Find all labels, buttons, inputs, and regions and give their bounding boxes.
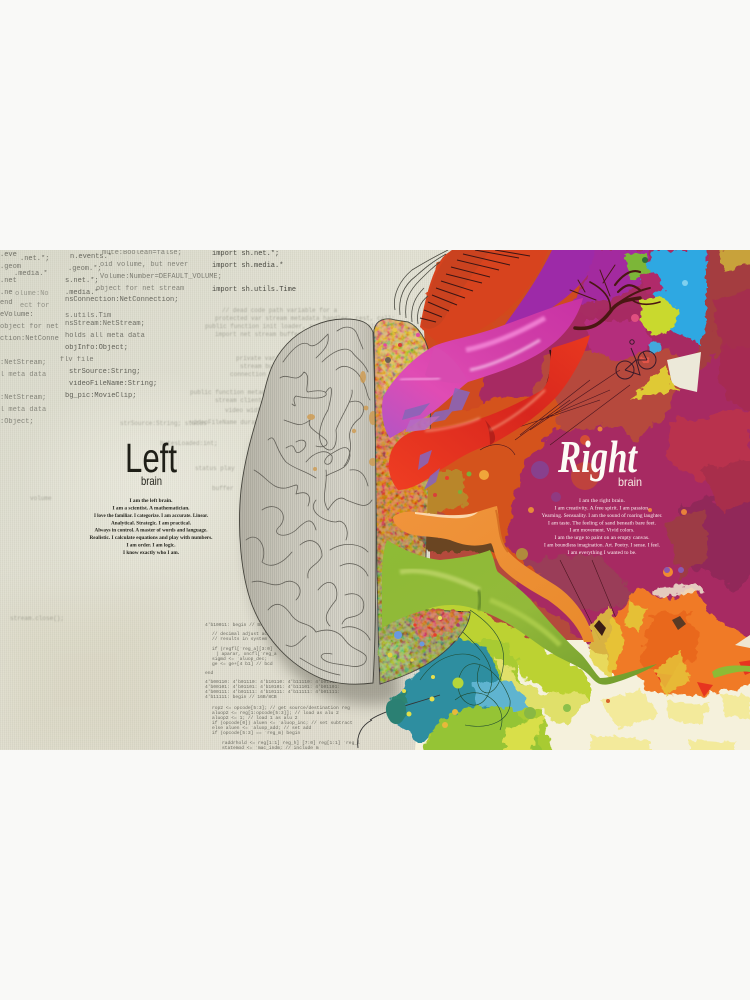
panel: left canvas [0,250,470,760]
code text: upper left: ect for [20,302,49,310]
code text: upper left: :NetStream; [0,394,46,402]
code text: upper left: .geom [0,263,21,271]
faint code text background: volume [30,495,52,502]
heading: Right: Right [557,431,638,482]
right brain description: I am taste. The feeling of sand beneath bare feet. [548,519,657,526]
code text: lower centre: aluop2 <= 1; // load 1 as alu 2 [212,715,298,721]
faint code text background: // dead code path variable for a [222,307,338,314]
left brain hemisphere [239,319,377,684]
code text: upper left: nsConnection:NetConnection; [65,296,178,304]
code text: upper left: n.events.* [70,253,112,261]
right brain description [542,498,663,556]
scribble in teal area [358,610,510,748]
code text: upper left: :Object; [0,418,34,426]
code text: upper left: videoFileName:String; [69,380,157,388]
paint mass: magenta base [479,328,616,661]
code text: upper left: l meta data [0,406,46,414]
staircase drawing lines [420,250,530,322]
code text: upper left: bg_pic:MovieClip; [65,392,136,400]
code text: lower centre: 4'b00101: 4'b01101: 4'b10101: 4'b11101: 4'b01101: [205,684,340,690]
icon: bicycle [616,340,656,379]
left brain description: I am a scientist. A mathematician. [112,505,190,511]
paint: light blue splash [640,250,706,345]
icon: tree [570,265,660,328]
code text: upper left: l meta data [0,371,46,379]
brain shadow [242,564,406,712]
faint code text background: import net stream buffer bytes [215,331,323,338]
text block: right brain [542,431,663,556]
code text: upper left: import sh.net.*; [212,250,279,258]
faint code text background: private var loaded total data [236,355,341,362]
left brain description: I love the familiar. I categorize. I am accurate. Linear. [94,513,209,519]
code text: upper left: mute:Boolean=false; [102,249,182,257]
right brain description: I am the urge to paint on an empty canvas. [554,535,650,541]
code text: lower centre [205,622,360,751]
faint code text background: status play [195,465,235,472]
code text: upper left: .media.* [65,289,99,297]
heading: Left: Left [125,435,177,481]
code text: lower centre: | aparar, oncfl[`reg_a [216,651,277,657]
code text: lower centre: if (regfl[`reg_a][3:0] [212,646,273,652]
left brain description: Analytical. Strategic. I am practical. [111,520,192,526]
code text: upper left: .eve [0,251,17,259]
subheading: brain: brain [618,475,642,489]
code text: upper left: olume:No [15,290,49,298]
right brain description: I am creativity. A free spirit. I am passion. [554,504,650,511]
paint: orange splash [605,590,750,698]
code text: lower centre: 4'b00110: 4'b01110: 4'b10110: 4'b11110: 4'b01110: [205,679,340,685]
cream patch [667,352,701,392]
paint: teal splash [392,635,530,740]
code text: lower centre: rop2 <= opcode[5:3]; // get source/destination reg [212,705,350,711]
paint: purple stripe [504,250,594,325]
right brain description: Yearning. Sensuality. I am the sound of roaring laughter. [542,512,663,519]
left brain description: I am the left brain. [130,498,173,504]
code text: lower centre: sigmd <= `aluop_dec; [212,656,267,662]
faint code text background: videoFileName duration seek bytes [190,419,309,426]
faint code text background: video width height [225,407,290,414]
faint code text background: buffer [212,485,234,492]
speckles on right brain [383,328,489,662]
faint code text background: strSource:String; status [120,420,207,427]
code text: upper left: object for net [0,323,59,331]
code text: lower centre: ge <= ge+[4 b1] // bcd [212,661,273,667]
code text: upper left: import sh.media.* [212,262,283,270]
code text: lower centre: if (opcode[5:3] == `reg_m) begin [212,730,300,736]
paint: yellow green splash [585,253,680,364]
code text: lower centre: statemod <= `mac_indm; // include m [222,745,319,751]
paint mass: orange red under the strokes [422,260,560,575]
right brain description: I am movement. Vivid colors. [570,528,635,534]
code text: upper left: Volume:Number=DEFAULT_VOLUME; [100,273,222,281]
yellow paint edge [630,365,680,400]
faint code text background [10,307,395,622]
code text: lower centre: raddrhold <= reg[1:1] reg_h] [7:0] reg[1:1] `reg_l [222,740,360,746]
code text: lower centre: 4'b11111: begin // 16B/8CB [205,694,277,700]
thin scribble lines [480,350,630,640]
right brain hemisphere [370,315,495,690]
code text: upper left: objInfo:Object; [65,344,128,352]
paint mass: mauve red [520,345,750,610]
code text: lower centre: 4'b00111: 4'b01111: 4'b10111: 4'b11111: 4'b01111: [205,689,340,695]
code text: lower centre: // decimal adjust accum [212,631,276,637]
code text: upper left: .ne [0,289,13,297]
cream stripe on magenta [650,583,702,597]
code text: upper left: holds all meta data [65,332,145,340]
code text: lower centre: aluop2 <= reg[1:opcode[5:3]]; // load as alu 2 [212,710,339,716]
artwork panel [0,240,750,760]
left brain description: Always in control. A master of words and language. [94,528,208,534]
code text: upper left: :NetStream; [0,359,46,367]
code text: lower centre: 4'b10011: begin // BAA [205,622,266,628]
code text: lower centre: else aluen <= `aluop_add; // set add [212,725,311,731]
yellow blotches [590,600,750,752]
code text: upper left: eVolume: [0,311,34,319]
right brain description: I am everything I wanted to be. [568,550,637,556]
faint code text background: public function metadata handler (e:Object) [190,389,345,396]
text block: left brain [90,435,213,556]
purple petals [402,388,470,490]
code text: upper left: strSource:String; [69,368,140,376]
code text: upper left: .media.* [14,270,48,278]
faint code text background: public function init loader, rest, get, set, play [205,323,382,330]
faint code text background: stream buffer time [240,363,305,370]
faint code text background: stream.close(); [10,615,64,622]
orange paint drips [307,371,377,471]
paint stroke: orange [393,506,594,642]
faint code text background: stream client metadata [215,397,295,404]
code text: upper left: s.utils.Tim [65,312,111,320]
code text: lower centre: if (opcode[0]) aluen <= `aluop_inc; // set subtract [212,720,353,726]
left brain description: I know exactly who I am. [123,550,180,556]
code text: upper left: .net.*; [20,255,49,263]
paint: upper red wedge [420,250,452,330]
paint mass: top right brown [695,250,750,412]
code text: lower centre: end [205,670,214,676]
code text: upper left: nsStream:NetStream; [65,320,145,328]
teal drip [386,699,406,724]
code text: upper left: .geom.*; [68,265,102,273]
faint code text background: connection client object [230,371,316,378]
code text: upper left: oid volume, but never [100,261,188,269]
base paint layers [415,250,750,750]
faint code text background: protected var stream metadata handler, rest, call; [215,315,395,322]
red triangles on orange [655,660,750,697]
paint stroke: green [382,540,750,685]
right brain description: I am the right brain. [579,498,626,504]
green grass front [422,704,546,750]
left brain description: Realistic. I calculate equations and play with numbers. [90,535,213,541]
code text: upper left: ction:NetConne [0,335,59,343]
right brain description: I am boundless imagination. Art. Poetry. I sense. I feel. [544,542,661,549]
brain folds [246,327,372,675]
faint code text background: bytesLoaded:int; [160,440,218,447]
paint splatter dots [402,257,688,728]
code text: upper left: .net [0,277,17,285]
code text: upper left [0,249,296,426]
code text: upper left: end [0,299,13,307]
code text: upper left: import sh.utils.Time [212,286,296,294]
code text: upper left: flv file [60,356,94,364]
left brain description [90,498,213,556]
code text: lower centre: // results in system [212,636,267,642]
paint stroke: red [389,335,590,490]
subheading: brain: brain [141,474,162,488]
paint: yellow green splash lower [426,605,592,750]
contour lines left of wedge [394,250,448,324]
code text: upper left: s.net.*; [65,277,99,285]
panel: right painted area [358,240,750,760]
paint stroke: pink [382,298,583,438]
code text: upper left: object for net stream [96,285,184,293]
left brain description: I am order. I am logic. [126,543,176,549]
